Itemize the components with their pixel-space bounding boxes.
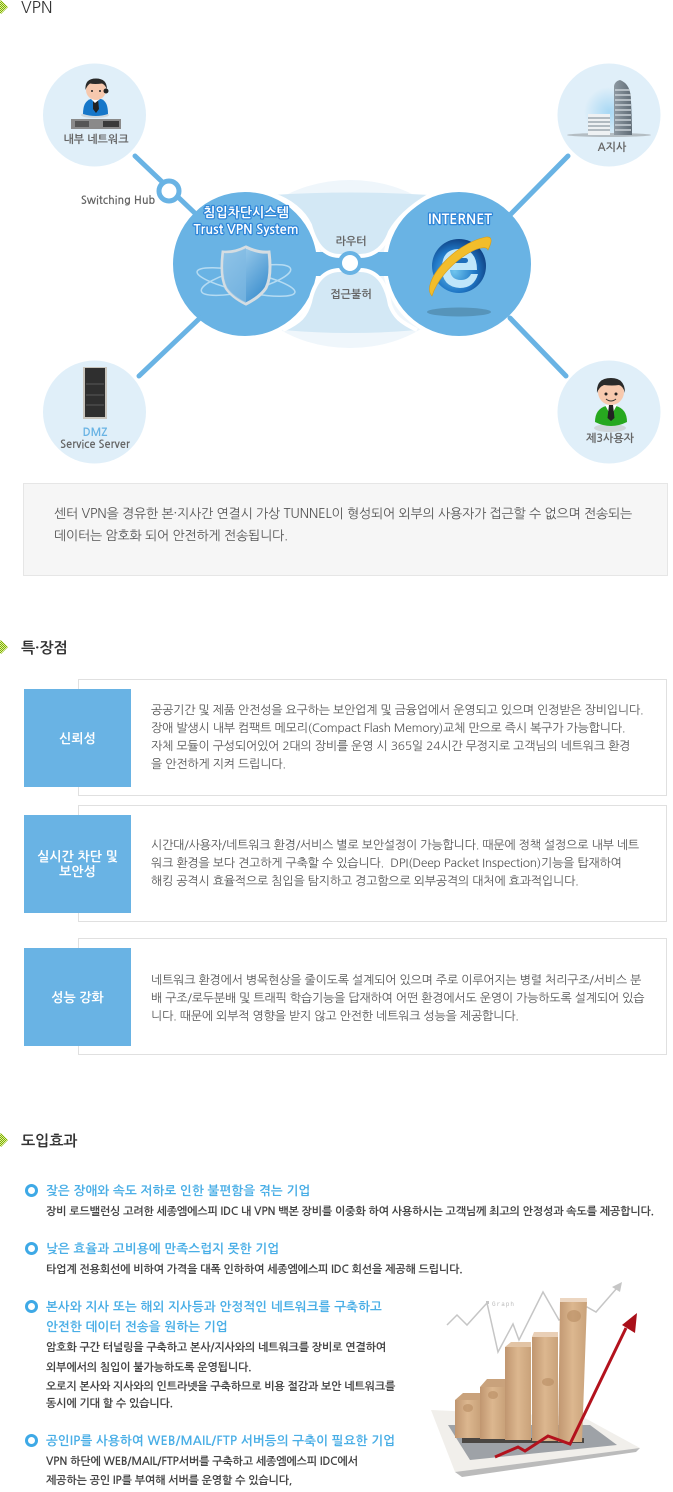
item body 4: 제공하는 공인 IP를 부여해 서버를 운영할 수 있습니다, xyxy=(46,1475,292,1486)
icon: shield xyxy=(195,247,297,304)
panel: real-time blocking outline xyxy=(78,805,667,922)
heading: features: 특·장점 xyxy=(21,641,68,656)
tunnel: outer halo xyxy=(238,180,462,348)
tunnel: upper chamber xyxy=(273,192,430,256)
panel: performance label: 성능 강화 xyxy=(51,990,104,1004)
node: internal network xyxy=(43,64,146,166)
label: third-party user: 제3사용자 xyxy=(586,432,635,444)
label: Service Server: Service Server xyxy=(60,439,131,450)
item body 3: 오로지 본사와 지사와의 인트라넷을 구축하므로 비용 절감과 보안 네트워크를 xyxy=(46,1381,395,1392)
text: VPN description line 2: 데이터는 암호화 되어 안전하게 전송됩니다. xyxy=(54,529,288,542)
item body 4 xyxy=(46,1456,358,1486)
label: DMZ: DMZ xyxy=(83,427,107,438)
item body 3 xyxy=(46,1342,396,1409)
illustration: wooden bar chart xyxy=(431,1282,640,1477)
icon: section marker features xyxy=(0,640,8,654)
text: reliability: 을 안전하게 지켜 드립니다. xyxy=(151,758,286,770)
connectors xyxy=(135,156,568,376)
icon: bullet 4 xyxy=(25,1434,38,1447)
label: firewall system: 침입차단시스템 xyxy=(203,206,289,219)
text: reliability: 공공기간 및 제품 안전성을 요구하는 보안업계 및 금융업에서 운영되고 있으며 인정받은 장비입니다. xyxy=(151,704,643,716)
label: Trust VPN System: Trust VPN System xyxy=(193,223,299,236)
item title 2: 낮은 효율과 고비용에 만족스럽지 못한 기업 xyxy=(46,1242,279,1255)
main blue hubs xyxy=(171,190,533,338)
node: DMZ service server xyxy=(43,360,146,464)
item body 4: VPN 하단에 WEB/MAIL/FTP서버를 구축하고 세종엠에스피 IDC에서 xyxy=(46,1456,358,1467)
panel: real-time blocking label xyxy=(24,815,131,913)
panel: reliability label xyxy=(24,689,131,787)
panel: VPN description xyxy=(23,483,668,576)
node: third-party user xyxy=(558,360,660,464)
label: Graph: Graph xyxy=(492,1301,515,1308)
text: real-time blocking: 해킹 공격시 효율적으로 침입을 탐지하고 경고함으로 외부공격의 대처에 효과적입니다. xyxy=(151,875,579,887)
text: performance: 배 구조/로두분배 및 트래픽 학습기능을 답재하여 어떤 환경에서도 운영이 가능하도록 설계되어 있습 xyxy=(151,992,644,1004)
text: performance: 니다. 때문에 외부적 영향을 받지 않고 안전한 네트워크 성능을 제공합니다. xyxy=(151,1010,519,1022)
heading: adoption effects: 도입효과 xyxy=(21,1134,77,1149)
item body 2: 타업계 전용회선에 비하여 가격을 대폭 인하하여 세종엠에스피 IDC 회선을 제공해 드립니다. xyxy=(46,1264,462,1275)
text: performance: 네트워크 환경에서 병목현상을 줄이도록 설계되어 있으며 주로 이루어지는 병렬 처리구조/서비스 분 xyxy=(151,974,641,986)
item body 3: 외부에서의 침입이 불가능하도록 운영됩니다. xyxy=(46,1362,251,1373)
text: real-time blocking: 워크 환경을 보다 견고하게 구축할 수 있습니다. DPI(Deep Packet Inspection)기능을 탑재하여 xyxy=(151,857,622,869)
text: VPN description line 1: 센터 VPN을 경유한 본·지사간 연결시 가상 TUNNEL이 형성되어 외부의 사용자가 접근할 수 없으며 전송되는 xyxy=(54,507,632,520)
panel: real-time blocking label: 보안성 xyxy=(59,865,96,878)
item title 3 xyxy=(46,1300,382,1333)
label: access denied: 접근불허 xyxy=(330,288,372,300)
item body 1: 장비 로드밸런싱 고려한 세종엠에스피 IDC 내 VPN 백본 장비를 이중화 하여 사용하시는 고객님께 최고의 안정성과 속도를 제공합니다. xyxy=(46,1206,654,1217)
router node xyxy=(340,253,360,273)
heading: VPN: VPN xyxy=(21,0,53,16)
label: router: 라우터 xyxy=(335,235,367,247)
node: branch A xyxy=(558,64,660,166)
wooden bars xyxy=(455,1298,587,1443)
panel: performance label xyxy=(24,948,131,1046)
red arrow xyxy=(495,1328,626,1457)
item body 3: 암호화 구간 터널링을 구축하고 본사/지사와의 네트워크를 장비로 연결하여 xyxy=(46,1342,386,1353)
text: performance xyxy=(151,974,644,1022)
icon: section marker VPN xyxy=(0,0,8,14)
panel: real-time blocking label: 실시간 차단 및 xyxy=(37,850,118,863)
text: reliability: 장애 발생시 내부 컴팩트 메모리(Compact Flash Memory)교체 만으로 즉시 복구가 가능합니다. xyxy=(151,722,625,734)
panel: reliability outline xyxy=(78,679,667,796)
text: reliability xyxy=(151,704,643,770)
text: real-time blocking: 시간대/사용자/네트워크 환경/서비스 별로 보안설정이 가능합니다. 때문에 정책 설정으로 내부 네트 xyxy=(151,839,639,851)
icon: bullet 1 xyxy=(25,1184,38,1197)
paper xyxy=(431,1410,640,1472)
text: real-time blocking xyxy=(151,839,639,887)
grey trend line xyxy=(447,1288,617,1352)
item title 3: 본사와 지사 또는 해외 지사등과 안정적인 네트워크를 구축하고 xyxy=(46,1300,382,1313)
item title 4: 공인IP를 사용하여 WEB/MAIL/FTP 서버등의 구축이 필요한 기업 xyxy=(46,1434,395,1447)
tunnel: lower chamber xyxy=(283,270,417,333)
icon: section marker effects xyxy=(0,1133,8,1147)
label: internal network: 내부 네트워크 xyxy=(63,133,129,145)
switching hub node xyxy=(159,181,179,201)
icon: internet browser xyxy=(427,237,491,316)
label: INTERNET: INTERNET xyxy=(428,213,492,227)
label: Switching Hub: Switching Hub xyxy=(81,195,156,206)
panel: performance outline xyxy=(78,938,667,1055)
icon: bullet 2 xyxy=(25,1242,38,1255)
label: branch A: A지사 xyxy=(598,141,627,153)
item body 3: 동시에 기대 할 수 있습니다. xyxy=(46,1398,173,1409)
icon: bullet 3 xyxy=(25,1300,38,1313)
item title 1: 잦은 장애와 속도 저하로 인한 불편함을 겪는 기업 xyxy=(46,1184,310,1197)
diagram: VPN network xyxy=(43,64,660,464)
panel: reliability label: 신뢰성 xyxy=(59,732,96,744)
text: reliability: 자체 모듈이 구성되어있어 2대의 장비를 운영 시 365일 24시간 무정지로 고객님의 네트워크 환경 xyxy=(151,740,630,752)
item title 3: 안전한 데이터 전송을 원하는 기업 xyxy=(46,1320,228,1333)
